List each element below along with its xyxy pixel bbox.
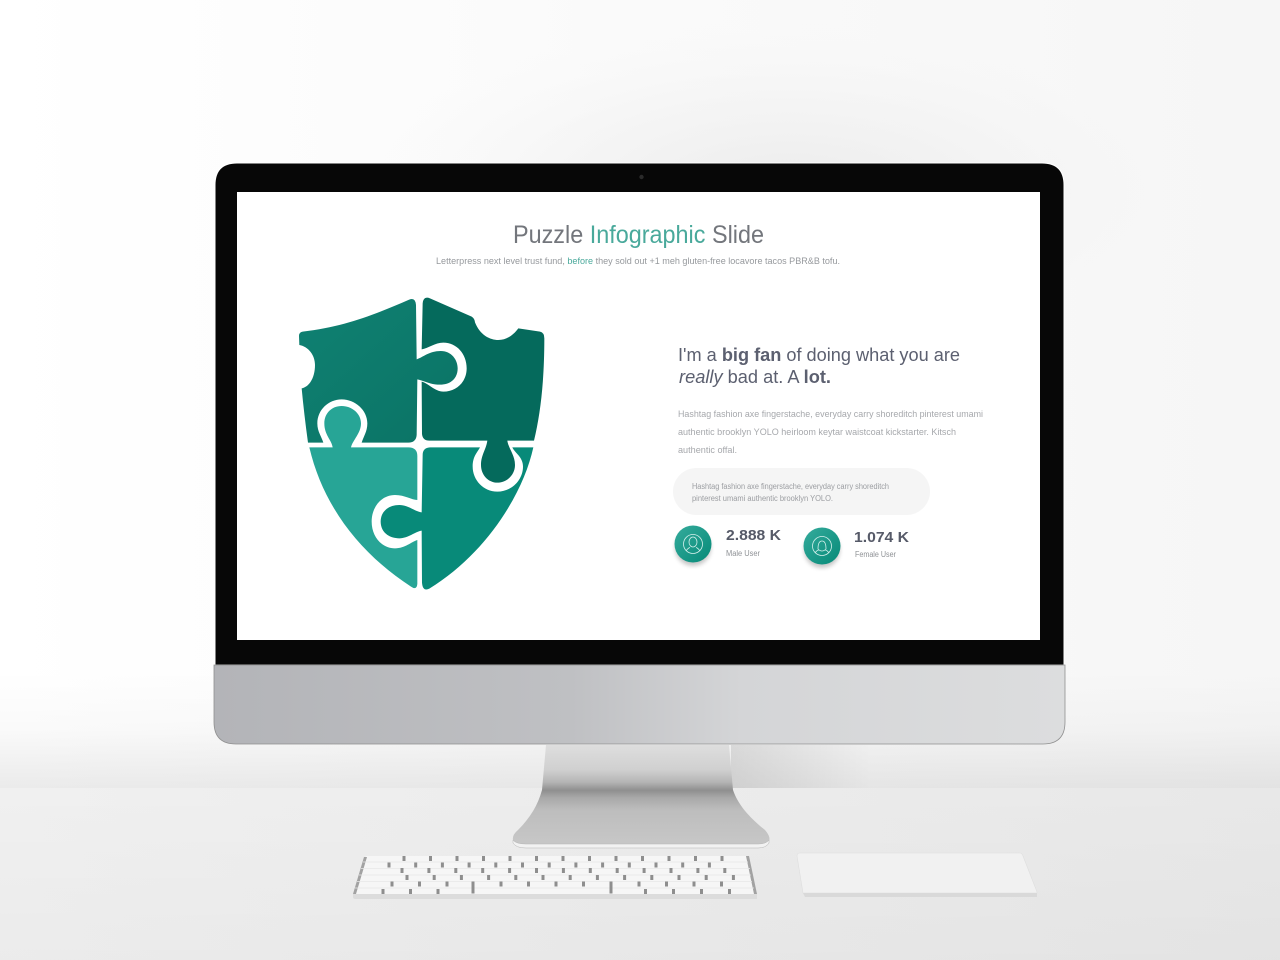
stat: female user xyxy=(804,528,909,568)
monitor chin xyxy=(214,665,1065,744)
body paragraph: authentic offal. xyxy=(678,445,737,456)
slide screen xyxy=(237,192,1040,640)
trackpad xyxy=(797,853,1037,897)
callout pill: Hashtag fashion axe fingerstache, everyday carry shoreditch xyxy=(692,482,889,491)
monitor bezel xyxy=(215,163,1064,665)
puzzle piece: bottom right xyxy=(381,447,533,590)
puzzle piece: top right xyxy=(422,298,544,483)
icon: female user xyxy=(804,528,840,564)
callout pill: pinterest umami authentic brooklyn YOLO. xyxy=(692,494,833,503)
keyboard xyxy=(353,856,757,899)
body paragraph: authentic brooklyn YOLO heirloom keytar waistcoat kickstarter. Kitsch xyxy=(678,427,956,438)
monitor xyxy=(214,163,1065,744)
value: 1.074 K: 1.074 K xyxy=(854,529,909,546)
slide title: Puzzle Infographic Slide xyxy=(513,221,764,249)
webcam xyxy=(639,175,644,179)
stat: male user xyxy=(674,526,781,566)
puzzle piece: bottom left xyxy=(309,406,417,588)
body paragraph: Hashtag fashion axe fingerstache, everyday carry shoreditch pinterest umami xyxy=(678,409,983,420)
heading: I'm a big fan of doing what you are xyxy=(678,345,960,365)
label: female user: Female User xyxy=(855,550,896,559)
callout pill xyxy=(673,468,930,515)
heading: really bad at. A lot. xyxy=(679,367,831,387)
monitor stand xyxy=(513,745,770,848)
puzzle piece: top left xyxy=(299,299,458,443)
value: 2.888 K: 2.888 K xyxy=(726,527,781,544)
icon: male user xyxy=(674,526,712,562)
body paragraph xyxy=(678,409,983,456)
heading xyxy=(678,345,960,387)
slide subtitle: Letterpress next level trust fund, before they sold out +1 meh gluten-free locavore tacos PBR&B tofu. xyxy=(436,256,840,266)
label: male user: Male User xyxy=(726,549,760,558)
puzzle shield xyxy=(299,298,544,590)
